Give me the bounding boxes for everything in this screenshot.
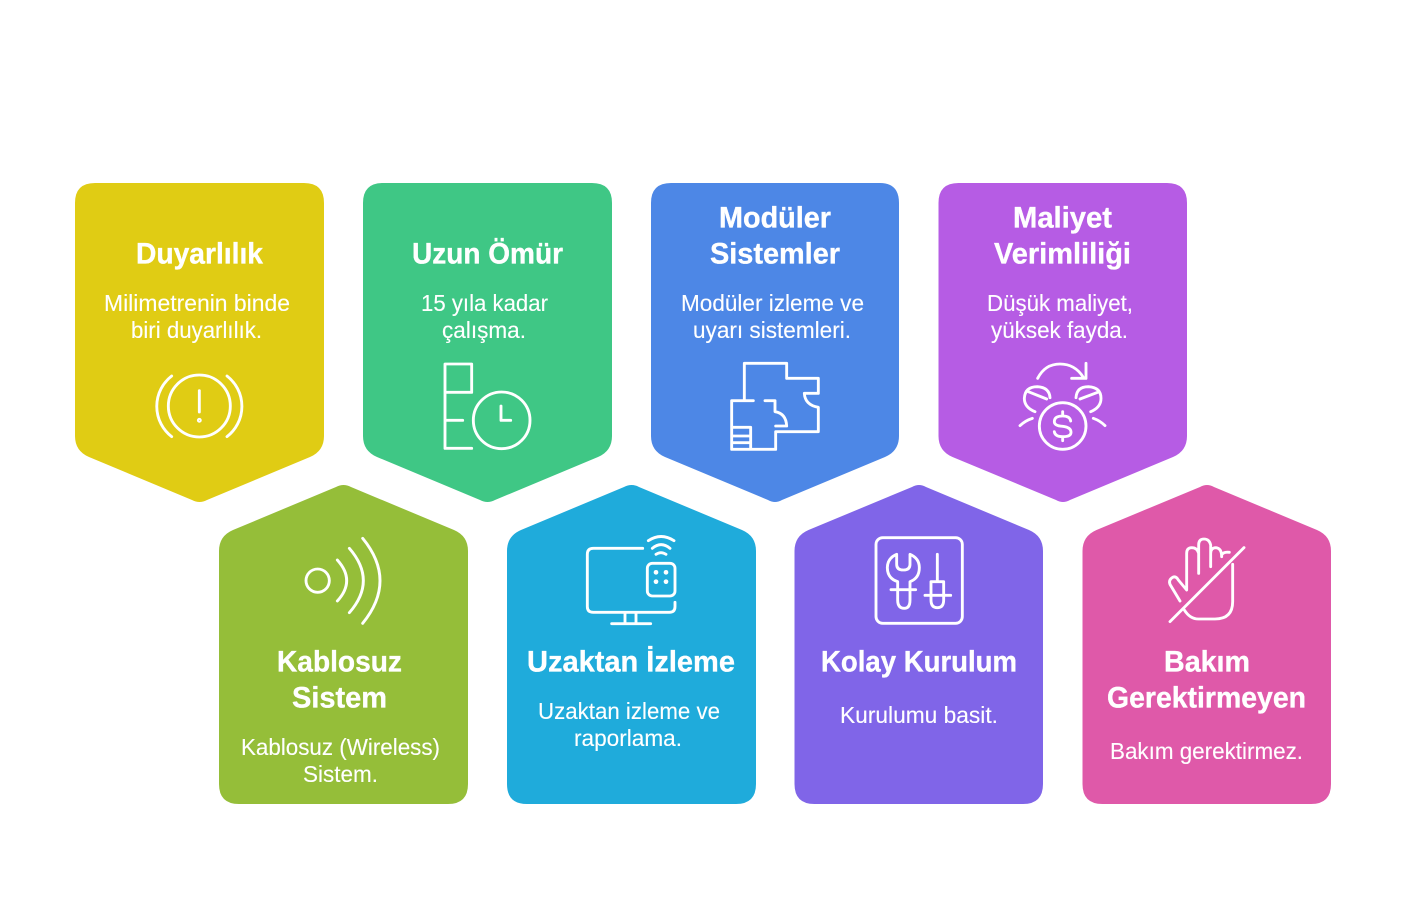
text: Uzaktan İzleme description: Uzaktan izleme ve bbox=[538, 698, 720, 724]
heading: Kablosuz Sistem: Kablosuz bbox=[277, 645, 402, 678]
heading: Maliyet Verimliliği: Maliyet bbox=[1013, 201, 1112, 234]
heading: Bakım Gerektirmeyen: Bakım bbox=[1164, 645, 1250, 678]
heading: Uzaktan İzleme: Uzaktan İzleme bbox=[527, 645, 735, 678]
heading: Modüler Sistemler: Sistemler bbox=[710, 237, 840, 270]
text: Uzun Ömür description: çalışma. bbox=[442, 317, 526, 343]
text: Duyarlılık description bbox=[104, 290, 290, 343]
panel: Duyarlılık bbox=[75, 183, 324, 502]
text: Uzun Ömür description: 15 yıla kadar bbox=[421, 290, 548, 316]
panel: Uzun Ömür bbox=[363, 183, 612, 502]
text: Modüler Sistemler description: uyarı sistemleri. bbox=[693, 317, 851, 343]
icon: dollar coin cycle bbox=[1020, 363, 1105, 449]
heading: Uzun Ömür: Uzun Ömür bbox=[412, 237, 563, 270]
text: Maliyet Verimliliği description: yüksek fayda. bbox=[991, 317, 1128, 343]
text: Kolay Kurulum description: Kurulumu basit. bbox=[840, 702, 998, 728]
text: Kablosuz Sistem description: Kablosuz (Wireless) bbox=[241, 734, 440, 760]
text: Maliyet Verimliliği description: Düşük maliyet, bbox=[987, 290, 1133, 316]
text: Modüler Sistemler description: Modüler izleme ve bbox=[681, 290, 864, 316]
heading: Kolay Kurulum: Kolay Kurulum bbox=[821, 645, 1017, 678]
icon: monitor and remote bbox=[587, 536, 675, 624]
panel: Kolay Kurulum bbox=[794, 485, 1043, 804]
heading: Modüler Sistemler bbox=[710, 201, 840, 270]
text: Uzun Ömür description bbox=[421, 290, 548, 343]
text: Kablosuz Sistem description: Sistem. bbox=[303, 761, 378, 787]
icon: alert circle bbox=[157, 375, 242, 437]
text: Uzaktan İzleme description: raporlama. bbox=[574, 725, 682, 751]
text: Uzaktan İzleme description bbox=[538, 698, 720, 751]
heading: Kablosuz Sistem: Sistem bbox=[292, 681, 387, 714]
text: Modüler Sistemler description bbox=[681, 290, 864, 343]
panel: Modüler Sistemler bbox=[651, 183, 899, 502]
icon: wireless signal bbox=[306, 538, 380, 623]
text: Duyarlılık description: Milimetrenin binde bbox=[104, 290, 290, 316]
heading: Modüler Sistemler: Modüler bbox=[719, 201, 831, 234]
text: Kablosuz Sistem description bbox=[241, 734, 440, 787]
icon: wrench and screwdriver bbox=[876, 538, 962, 623]
heading: Bakım Gerektirmeyen: Gerektirmeyen bbox=[1107, 681, 1306, 714]
panel: Kablosuz Sistem bbox=[219, 485, 468, 804]
text: Bakım Gerektirmeyen description: Bakım gerektirmez. bbox=[1110, 738, 1303, 764]
heading: Maliyet Verimliliği bbox=[994, 201, 1131, 270]
heading: Kablosuz Sistem bbox=[277, 645, 402, 714]
icon: floor plan bbox=[732, 363, 818, 449]
icon: blocks and clock bbox=[445, 364, 530, 449]
icon: crossed-out hand bbox=[1170, 539, 1244, 622]
panel: Maliyet Verimliliği bbox=[938, 183, 1187, 502]
text: Maliyet Verimliliği description bbox=[987, 290, 1133, 343]
heading: Duyarlılık: Duyarlılık bbox=[136, 237, 263, 270]
heading: Bakım Gerektirmeyen bbox=[1107, 645, 1306, 714]
panel: Uzaktan İzleme bbox=[507, 485, 756, 804]
heading: Maliyet Verimliliği: Verimliliği bbox=[994, 237, 1131, 270]
text: Duyarlılık description: biri duyarlılık. bbox=[131, 317, 262, 343]
panel: Bakım Gerektirmeyen bbox=[1082, 485, 1331, 804]
